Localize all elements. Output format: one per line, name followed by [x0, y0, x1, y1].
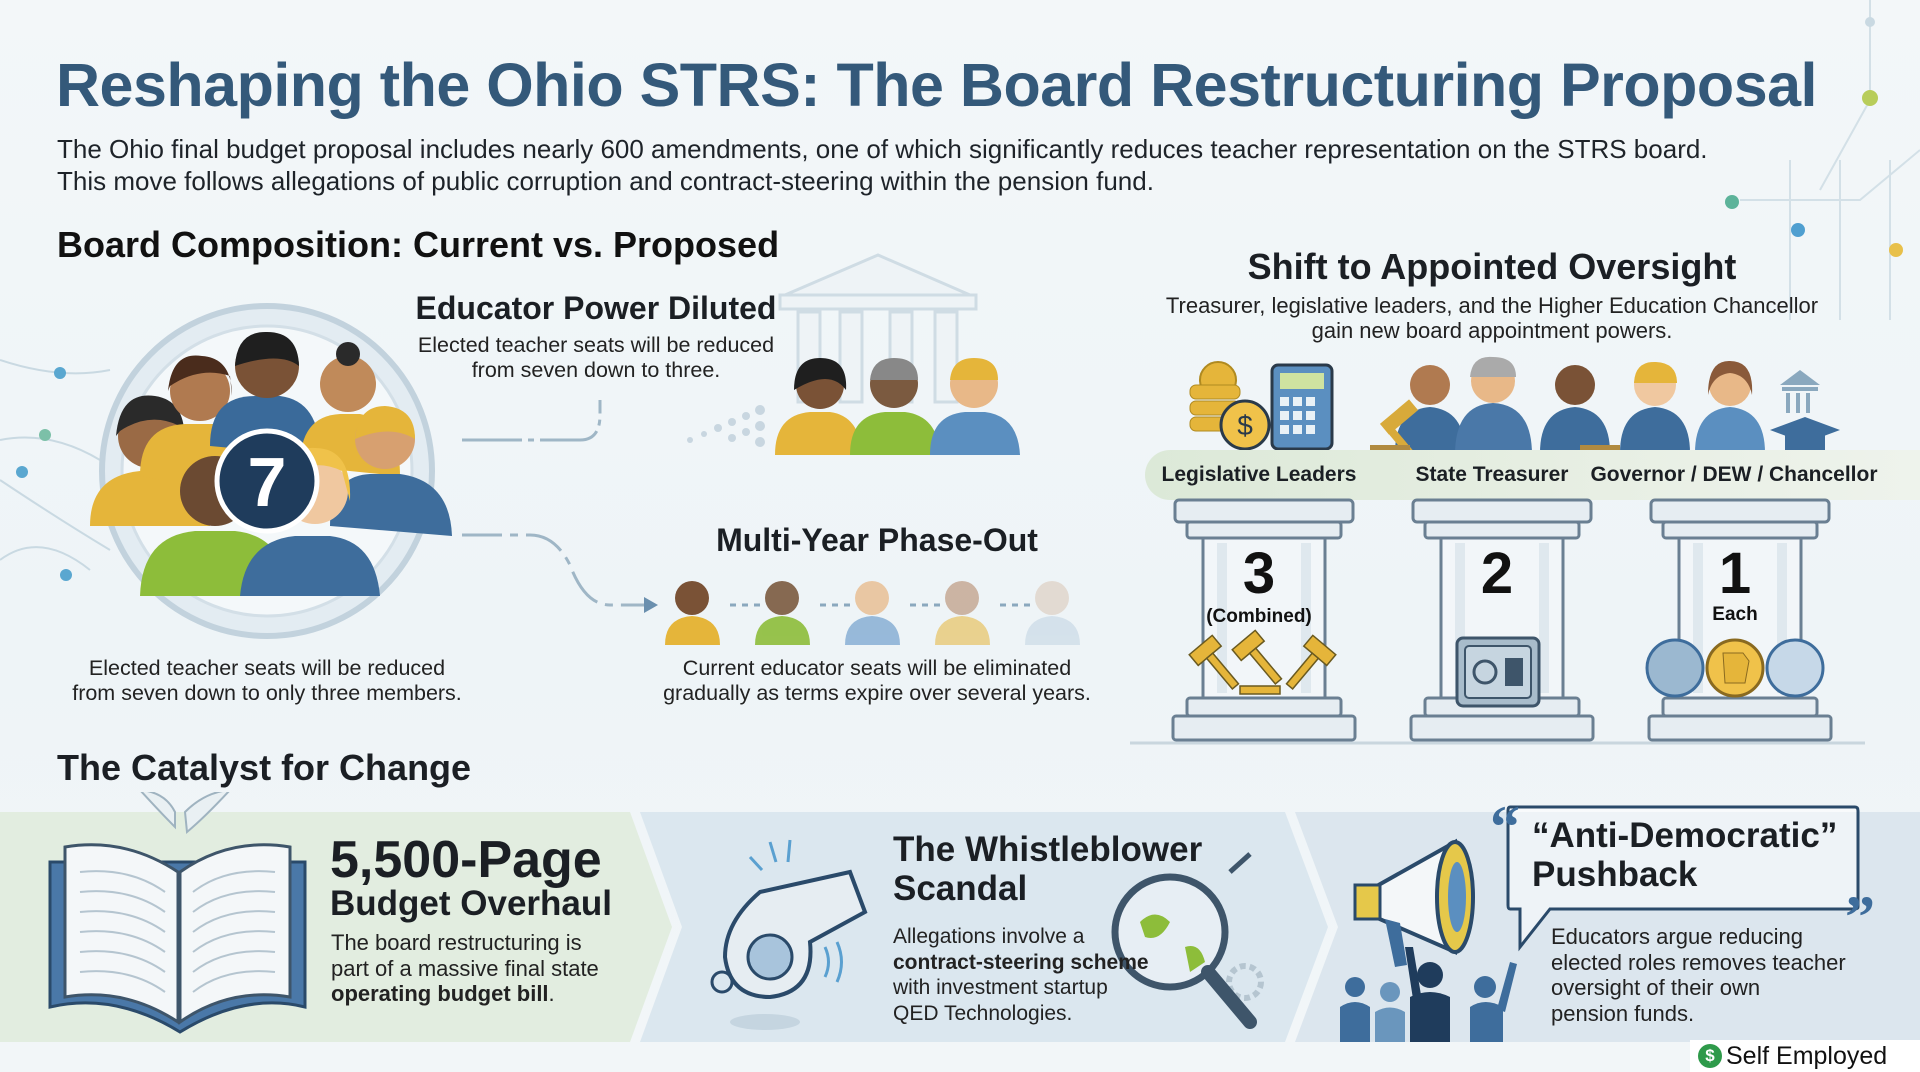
- intro text: [57, 134, 1708, 196]
- caption: phase-out: gradually as terms expire over several years.: [663, 681, 1091, 705]
- label: state treasurer: State Treasurer: [1416, 463, 1568, 486]
- title: whistleblower: [893, 830, 1202, 908]
- circle: seven teachers: [90, 303, 452, 639]
- text: whistleblower: with investment startup: [893, 976, 1108, 999]
- heading: multi-year phase-out: Multi-Year Phase-Out: [716, 522, 1038, 558]
- pillars: [1130, 498, 1865, 744]
- icon: megaphone: [1354, 838, 1475, 967]
- text: budget: [331, 930, 599, 1006]
- title: Reshaping the Ohio STRS: The Board Restructuring Proposal: [56, 51, 1817, 119]
- text: pushback: Educators argue reducing: [1551, 924, 1803, 949]
- text: pushback: pension funds.: [1551, 1000, 1694, 1026]
- caption: seven to three: [72, 656, 462, 705]
- icon: phase-out people row: [665, 581, 1080, 645]
- text: oversight: gain new board appointment powers.: [1312, 318, 1672, 343]
- pillars: 3: [1243, 541, 1275, 606]
- panel: whistleblower: [710, 830, 1264, 1030]
- intro text: The Ohio final budget proposal includes nearly 600 amendments, one of which significantly reduces teacher representation on the STRS board.: [57, 134, 1708, 164]
- title: anti-democratic: Pushback: [1532, 855, 1697, 894]
- icon: magnifier: [1112, 852, 1264, 1029]
- title: anti-democratic: [1532, 816, 1837, 894]
- pillars: (Combined): [1206, 606, 1312, 627]
- decorative network: [1725, 0, 1920, 320]
- icons: appointer groups: $: [1237, 410, 1253, 441]
- text: oversight: [1166, 293, 1818, 343]
- number badge 7: 7: [248, 443, 286, 521]
- panel: anti-democratic pushback: [1340, 797, 1875, 1042]
- text: educator power: Elected teacher seats will be reduced: [418, 333, 774, 357]
- bottom band: [0, 792, 1920, 1042]
- text: oversight: Treasurer, legislative leaders, and the Higher Education Chancellor: [1166, 293, 1818, 318]
- title: anti-democratic: “Anti-Democratic”: [1532, 816, 1837, 855]
- subtitle: budget overhaul: Budget Overhaul: [330, 884, 612, 923]
- text: pushback: elected roles removes teacher: [1551, 950, 1846, 974]
- speech bubble: ”: [1845, 884, 1875, 950]
- pillars: 2: [1481, 541, 1513, 606]
- caption: phase-out: Current educator seats will be eliminated: [683, 656, 1071, 680]
- label: governor: Governor / DEW / Chancellor: [1590, 463, 1878, 486]
- text: budget: The board restructuring is: [331, 930, 582, 955]
- label band: [1145, 450, 1920, 500]
- text: budget: operating budget bill.: [331, 981, 555, 1006]
- title: whistleblower: Scandal: [893, 869, 1027, 908]
- panel: budget overhaul: [48, 792, 612, 1034]
- text: pushback: oversight of their own: [1551, 975, 1760, 1000]
- text: whistleblower: QED Technologies.: [893, 1002, 1072, 1024]
- icon: open book: [48, 792, 306, 1034]
- connector lines: [462, 400, 658, 613]
- text: whistleblower: [893, 925, 1149, 1024]
- icons: appointer groups: [1190, 356, 1840, 450]
- text: educator power: from seven down to three.: [472, 358, 720, 382]
- caption: seven to three: from seven down to only three members.: [72, 681, 462, 705]
- badge: self employed: Self Employed: [1726, 1042, 1887, 1070]
- number badge 7: [217, 431, 317, 531]
- text: educator power: [418, 333, 774, 382]
- icon: crowd: [1340, 947, 1517, 1042]
- text: whistleblower: contract-steering scheme: [893, 950, 1149, 974]
- caption: phase-out: [663, 656, 1091, 705]
- text: whistleblower: Allegations involve a: [893, 925, 1084, 948]
- heading: board composition: Board Composition: Current vs. Proposed: [57, 224, 779, 265]
- title: 5,500-page: 5,500-Page: [330, 831, 602, 889]
- left decorative lines: [0, 359, 110, 581]
- icon: whistle: [710, 840, 868, 1030]
- badge: self employed: $: [1705, 1046, 1715, 1065]
- text: pushback: [1551, 924, 1846, 1026]
- heading: catalyst for change: The Catalyst for Change: [57, 747, 471, 788]
- intro text: This move follows allegations of public corruption and contract-steering within the pension fund.: [57, 166, 1154, 196]
- pillars: Each: [1712, 604, 1758, 625]
- speech bubble: [1490, 797, 1875, 952]
- title: whistleblower: The Whistleblower: [893, 830, 1202, 869]
- label: legislative leaders: Legislative Leaders: [1162, 463, 1356, 486]
- text: budget: part of a massive final state: [331, 956, 599, 980]
- pillars: 1: [1719, 541, 1751, 606]
- caption: seven to three: Elected teacher seats will be reduced: [89, 656, 445, 680]
- heading: shift to appointed oversight: Shift to Appointed Oversight: [1248, 246, 1736, 287]
- heading: educator power diluted: Educator Power Diluted: [416, 290, 776, 326]
- icon: temple with three teachers: [687, 254, 1020, 455]
- badge: self employed: [1690, 1040, 1920, 1072]
